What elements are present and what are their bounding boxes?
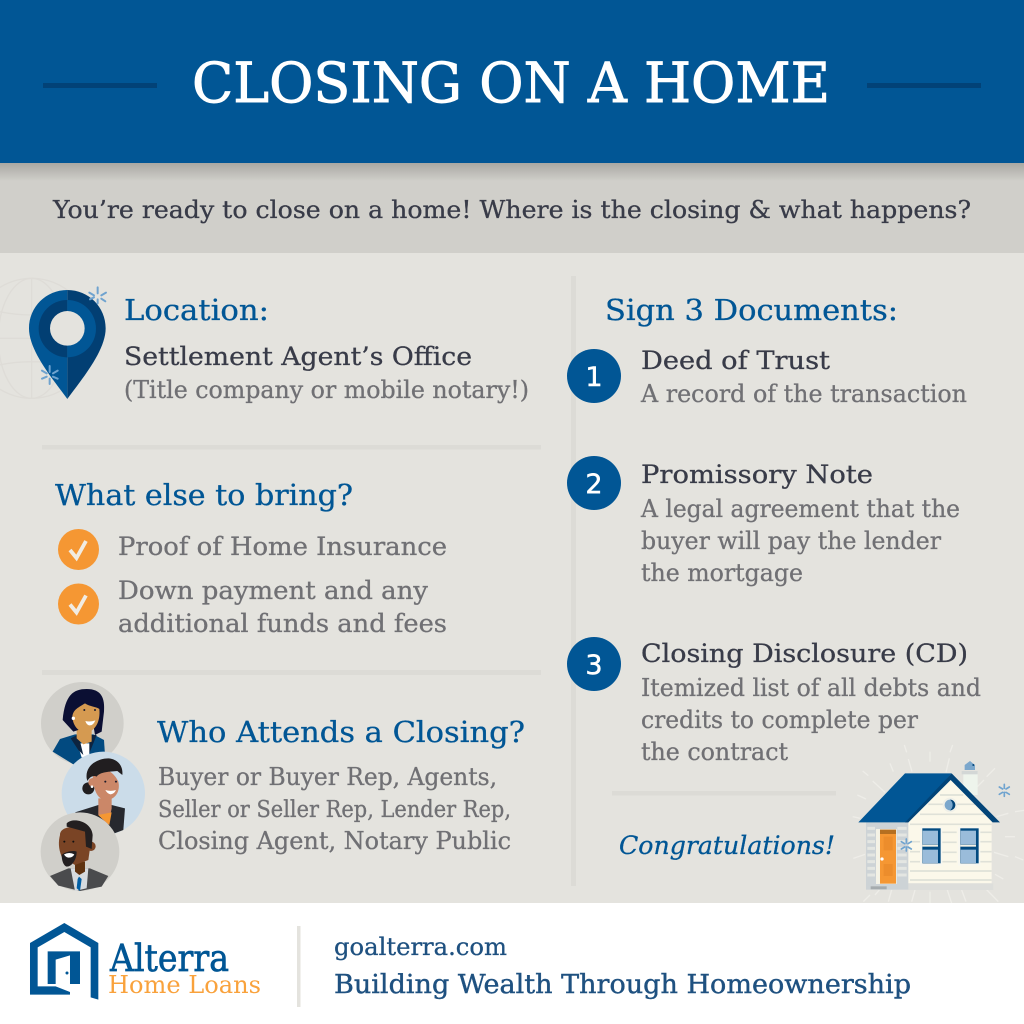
document 1: A record of the transaction [640,380,967,408]
location note: (Title company or mobile notary!) [124,376,529,404]
location name: Settlement Agent’s Office [124,342,472,371]
document 3: Itemized list of all debts and [641,674,981,702]
bring item 2: Down payment and any [118,576,429,605]
footer tagline: Building Wealth Through Homeownership [334,970,911,1000]
panel: location [0,278,529,404]
who attends list: Seller or Seller Rep, Lender Rep, [158,797,511,823]
document 2: Promissory Note [641,460,873,489]
document 3: credits to complete per [641,706,919,734]
icon: three people portraits [41,682,145,891]
document 3: 3 [585,650,603,681]
document 3: Closing Disclosure (CD) [641,639,968,668]
document 2: the mortgage [641,559,803,587]
footer [0,903,1024,1024]
document 2: 2 [585,469,603,500]
bring item 2: additional funds and fees [118,609,447,638]
who attends list: Closing Agent, Notary Public [158,827,511,855]
title: CLOSING ON A HOME [192,51,830,115]
footer website: goalterra.com [334,933,507,961]
panel: what else to bring [55,478,447,638]
panel: who attends [41,682,525,891]
icon: house with open door [30,923,98,1000]
bring item 1: Proof of Home Insurance [118,532,447,561]
icon: check 1 [58,529,99,570]
who attends heading: Who Attends a Closing? [157,715,525,749]
location heading: Location: [124,293,269,327]
document 2: A legal agreement that the [640,495,960,523]
documents heading: Sign 3 Documents: [605,293,898,327]
congratulations: Congratulations! [619,831,835,860]
document 2 [567,456,960,587]
bring item 2 [118,576,447,638]
document 1: 1 [585,362,603,393]
bring heading: What else to bring? [55,478,353,512]
icon: house [853,745,1024,903]
icon: check 2 [58,584,99,624]
logo: Alterra Home Loans: Home Loans [108,971,261,999]
logo: Alterra Home Loans [30,923,261,1000]
logo: Alterra Home Loans: Alterra [109,937,229,980]
subtitle band [0,163,1024,253]
icon: map pin with globe [0,278,106,399]
who attends list [158,763,511,855]
document 3 [567,637,981,766]
header banner [0,0,1024,163]
who attends list: Buyer or Buyer Rep, Agents, [158,763,497,791]
panel: sign 3 documents [567,293,981,766]
document 3: the contract [641,738,788,766]
document 1 [567,346,967,408]
subtitle text: You’re ready to close on a home! Where is the closing & what happens? [52,196,971,224]
document 1: Deed of Trust [641,346,830,375]
document 2: buyer will pay the lender [641,527,942,555]
